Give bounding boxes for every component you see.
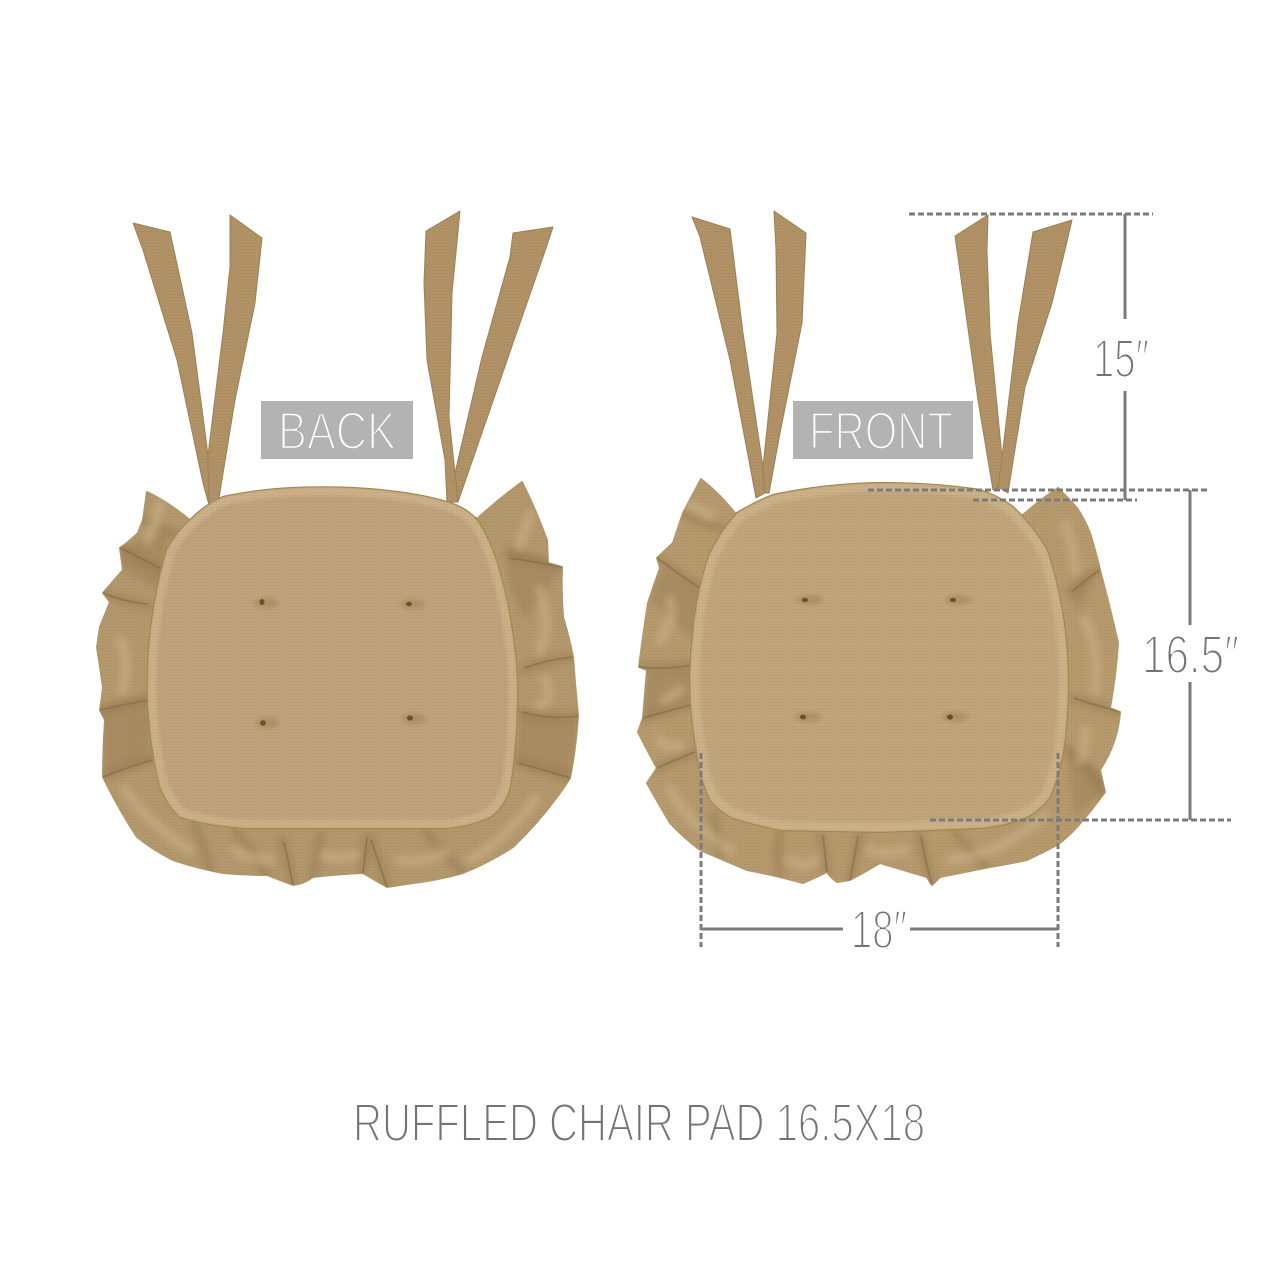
back pad ties — [133, 211, 553, 505]
label: front: FRONT — [809, 402, 953, 461]
front chair pad — [638, 211, 1120, 885]
back pad ruffle — [97, 482, 578, 887]
label: back: BACK — [278, 402, 396, 461]
dimension: 16.5 inch depth: 16.5″ — [1142, 625, 1239, 685]
front pad tufts — [794, 595, 972, 722]
caption: RUFFLED CHAIR PAD 16.5X18 — [353, 1093, 925, 1153]
front pad ruffle — [638, 479, 1120, 885]
back chair pad — [97, 211, 578, 887]
back pad tufts — [254, 598, 426, 728]
front pad cushion — [690, 483, 1068, 832]
front pad ties — [692, 211, 1072, 498]
dimension: 15 inch tie length: 15″ — [1093, 329, 1149, 389]
back pad cushion — [148, 487, 517, 828]
dimension: 18 inch width: 18″ — [851, 900, 907, 960]
